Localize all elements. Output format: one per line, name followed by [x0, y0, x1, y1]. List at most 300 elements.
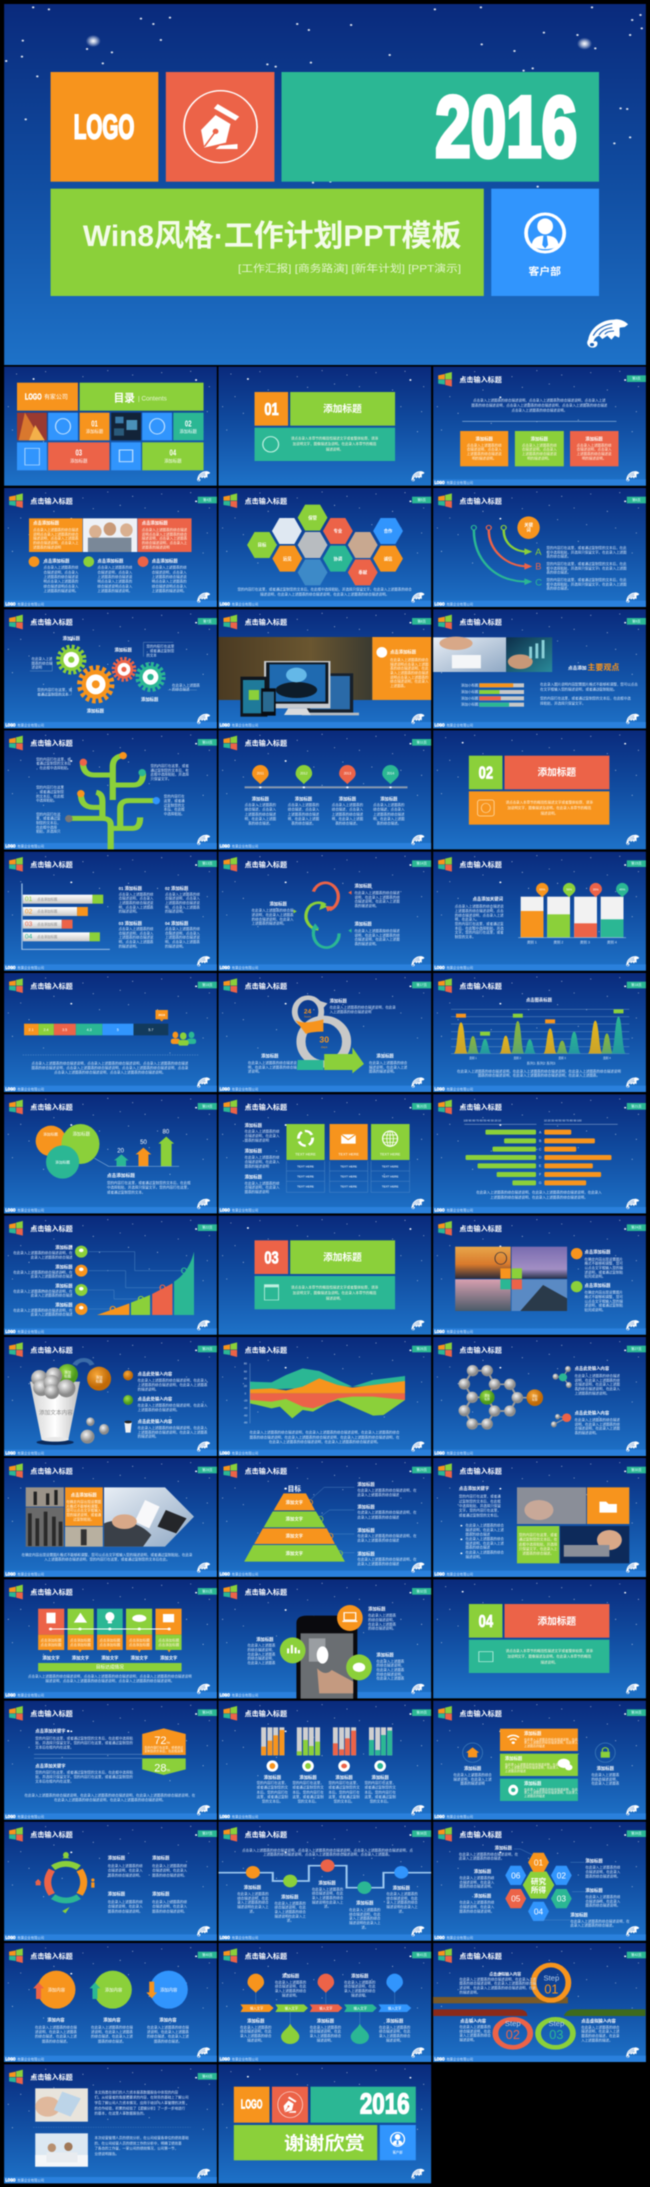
- slide: ring cycle: 添加标题: [108, 1891, 126, 1898]
- slide: key point bars: 在文字框输入您的描述说明，或者通过复制粘贴。: [540, 686, 617, 691]
- slide: phone with bubbles: 的综合描述说明，: [368, 1617, 396, 1622]
- slide: horizontal bars list: 合描述说明，点击录入: [119, 896, 154, 901]
- slide: three big circles: 添加内容: [48, 1986, 66, 1993]
- slide: three stacked bands: 添加标题: [505, 1755, 523, 1762]
- slide: intro three boxes: 合描述说明，点击录入: [467, 447, 502, 452]
- slide: hexagon research: 添加标题: [570, 1911, 588, 1918]
- slide: four city photos: 述说明，或者通过复制粘: [585, 1269, 623, 1274]
- slide: curved arrows: 词: [526, 527, 531, 533]
- slide: five columns: 描述说明，点击录入上述图表的综合描述说明，点击录入上述图表的综合描述说明。: [45, 1678, 174, 1683]
- slide: ring cycle: 图表的综合描述说明。: [152, 1872, 187, 1877]
- slide: photo grid with bullets: 此框中选择粘贴，并选择: [519, 1541, 558, 1546]
- slide: molecule: 标题: [532, 1397, 538, 1401]
- slide: photo grid with bullets: 您的内容打在这里，或者: [519, 1532, 558, 1537]
- slide: stacked bar chart: 有果企业有限公司: [446, 965, 473, 970]
- slide: circular arrows: 表的描述说明。: [354, 941, 379, 946]
- slide: photo collage arrow: 您可以点击文字框输入: [66, 1508, 102, 1513]
- slide: step rings: 点击输入内容: [460, 2017, 487, 2024]
- slide: stacked bar chart: 您的内容打在这里，或者通过复: [455, 921, 504, 926]
- slide: hexagon research: 05: [511, 1894, 521, 1904]
- slide: four city photos: 贴完成说明。: [585, 1307, 605, 1312]
- slide: hexagon research: 04: [534, 1906, 544, 1916]
- slide: hexagon research: 合描述说明，在此录入: [459, 1879, 495, 1884]
- slide: photo grid with bullets: 第30页: [631, 1467, 642, 1472]
- slide: three big circles: 述说明，在此录入上述图表: [35, 2029, 77, 2034]
- slide: cycle arrows 24/30: 有果企业有限公司: [232, 1086, 258, 1091]
- slide: timeline segmented bar: 3.5: [62, 1028, 67, 1032]
- slide: percent hexagons: 28%: [154, 1763, 170, 1775]
- slide: timeline pins: 上述图表的综合描述: [245, 811, 277, 816]
- slide: venn and arrows: [4, 1094, 217, 1213]
- slide: four bar groups: 您的文本后。: [262, 1799, 283, 1804]
- slide: section 02: 加说明文字，图像描述及说明。在此录入本章节的概括: [507, 805, 592, 810]
- slide: photo grid with bullets: 通过复制您的文本后，在: [519, 1537, 558, 1542]
- slide: step rings: 图表的综合描述说明，在此录入上述图表的综合描: [459, 1981, 537, 1986]
- slide: chevron process: 描述说明。: [247, 2037, 265, 2042]
- slide: three big circles: 述说明，在此录入上述图表: [91, 2029, 133, 2034]
- slide: chevron process: 第41页: [416, 1952, 427, 1957]
- slide: tree: 粘贴，并选择只: [36, 829, 61, 834]
- slide: team photo panels: 述图表的描述说明: [33, 544, 62, 549]
- slide: timeline segmented bar: 5.7: [148, 1028, 153, 1032]
- slide: key point bars: 添加小标题: [461, 695, 479, 700]
- slide: stepped line: 描述说明在此录入上: [349, 1920, 381, 1925]
- slide: circular arrows: 在此录入上述图表的综合描述: [354, 890, 400, 895]
- slide: stepped line: 描述说明在此录入上: [386, 1904, 418, 1909]
- slide: stacked area chart: -40: [243, 1406, 248, 1410]
- slide: ring cycle: 添加标题: [152, 1855, 170, 1862]
- slide: four city photos: 在确定内容出现设置图片: [585, 1290, 623, 1295]
- slide: cup and balls: 上述图表的综合描述说明，在此录入上述图表: [138, 1382, 208, 1387]
- slide: photo collage arrow: LOGO: [5, 1571, 16, 1576]
- slide: cup and balls: 标题: [64, 1373, 72, 1378]
- slide: cycle arrows 24/30: days: [321, 1045, 328, 1049]
- slide: timeline pins: 上述图表的综合描述: [288, 811, 320, 816]
- slide: four bar groups: 或者通过复制您的文: [257, 1785, 289, 1790]
- slide: section 04: 添加标题: [537, 1615, 576, 1627]
- slide: growth steps: 添加标题: [55, 1244, 73, 1251]
- slide: phone with bubbles: 在此录入上述图表: [247, 1643, 276, 1648]
- slide: step rings: 在此录入上述图表的综合: [581, 2024, 620, 2029]
- slide: horizontal bars list: 上述图表的综合描述说: [119, 900, 154, 905]
- slide: three stacked bands: 在此录入上述图表的综合描述说明，在此: [524, 1786, 578, 1791]
- slide: photo grid with bullets: 述图表的综合描述。: [522, 1551, 554, 1556]
- slide: phone with bubbles: 在此录入上述图表: [376, 1676, 405, 1681]
- slide: four bar groups: 您的内容打在这里，: [292, 1780, 324, 1785]
- slide: photo collage arrow: [4, 1458, 217, 1577]
- slide: horizontal bars list: 明，点击录入上述图表: [165, 904, 200, 909]
- slide: hexagon research: 在此录入上述图表的综: [585, 1865, 621, 1870]
- slide: timeline pins: 明，在此录入上述图: [288, 816, 320, 821]
- slide: percent hexagons: 复制您的文本后，在此框选择: [144, 1748, 183, 1753]
- slide: timeline pins: 2013: [344, 772, 351, 776]
- department tile: 客户部: [529, 265, 561, 278]
- slide: stacked bar chart: 第15页: [631, 861, 642, 866]
- slide: stepped line: 在此录入上述图表的: [237, 1891, 269, 1896]
- slide: table tiles: TEXT HERE: [382, 1185, 398, 1189]
- slide: stepped line: 第38页: [416, 1831, 427, 1836]
- slide: gears: LOGO: [5, 722, 16, 728]
- slide: cup and balls: 在此录入上述图表的综合描述说明，在此录入: [138, 1425, 208, 1430]
- slide: ring cycle: 点击输入标题: [30, 1830, 73, 1839]
- slide: hexagon research: 在此录入上述图表的综: [585, 1894, 621, 1899]
- slide: growth steps: 添加标题: [55, 1263, 73, 1270]
- slide: growth steps: 此录入上述图表的综合描述: [31, 1312, 73, 1317]
- slide: step rings: 02: [506, 2028, 520, 2042]
- slide: gears: 添加标题: [87, 707, 105, 714]
- slide: circular arrows: 述说明，在此录入上述图表: [252, 912, 294, 917]
- slide: ring cycle: 第37页: [202, 1831, 213, 1836]
- slide: chevron process: 综合描述说明，在此: [344, 1984, 376, 1989]
- slide: percent hexagons: 文本后在框内内在这里。: [35, 1745, 74, 1750]
- slide: timeline segmented bar: 有果企业有限公司: [17, 1086, 44, 1091]
- slide: hexagon research: 有果企业有限公司: [446, 1935, 473, 1940]
- slide: hexagon honeycomb: 您的内容打在这里，或者通过复制您的文本后，在此框中选择粘贴，并选择只保留文字。在此录入上述图表的综合: [237, 587, 412, 592]
- slide: hexagon research: LOGO: [434, 1934, 445, 1940]
- slide: phone with bubbles: 在此录入上述图表: [376, 1658, 405, 1663]
- slide: four bar groups: 您的内容打在这里，: [328, 1780, 360, 1785]
- slide: stacked area chart: 在此录入上述图表的综合描述说明，在此录入上述图表的综合描述说明。: [269, 1439, 380, 1444]
- slide: stacked bar chart: 上述图表的综合描述说明，点击: [455, 908, 504, 913]
- slide: butterfly chart: E: [539, 1164, 542, 1168]
- slide: intro three boxes: 点击录入上述图表的综: [577, 442, 612, 447]
- slide: timeline pins: 表的综合描述。: [291, 821, 316, 826]
- slide: stepped line: 描述说明在此录入上: [312, 1899, 344, 1904]
- slide: curved arrows: 有果企业有限公司: [446, 601, 473, 606]
- slide: team photo panels: 第4页: [203, 497, 212, 502]
- thumbnails rows 13 to 15: [4, 1822, 646, 2183]
- slide: two photos with text: 了各自的工作量，一家公司的绩效情况，公司第一节，: [95, 2146, 178, 2151]
- slide: four city photos: 格式不能够和调整，您可: [585, 1294, 623, 1299]
- slide: tree: 本后，在此框: [164, 807, 185, 812]
- slide: four bar groups: 本后。您的内容打在: [364, 1789, 396, 1794]
- slide: chevron process: 输入文字: [285, 2005, 299, 2010]
- slide: team photo panels: 点击录入上述图表的综: [97, 565, 133, 570]
- slide: gears: 您的内容打在这里: [146, 644, 175, 649]
- slide: tree: 此框中选择粘贴，并选择: [150, 772, 189, 777]
- slide: timeline pins: 添加标题: [380, 795, 398, 802]
- slide: three big circles: [4, 1943, 217, 2062]
- slide: cycle arrows 24/30: 点击输入标题: [245, 981, 287, 990]
- slide: molecule: 有果企业有限公司: [446, 1450, 473, 1455]
- slide: cup and balls: 添加: [64, 1369, 72, 1374]
- slide: horizontal bars list: 合描述说明，点击录入: [165, 896, 200, 901]
- slide: four bar groups: 或者通过复制您的文: [292, 1785, 324, 1790]
- slide: tree: 者通过复制您的文本后: [36, 761, 71, 766]
- slide: intro three boxes: 点击录入上述图表的综: [467, 442, 502, 447]
- slide: horizontal bars list: 明，点击录入上述图表: [165, 939, 200, 944]
- slide: horizontal bars list: 的描述说明。: [119, 909, 139, 914]
- slide: three big circles: 图表的综合描述。: [98, 2038, 126, 2043]
- slide: percent hexagons: 点击添加关键字 ■: [35, 1728, 70, 1735]
- slide: table tiles: 添加标题: [245, 1122, 263, 1129]
- slide: circular arrows: 点击输入标题: [245, 860, 287, 869]
- slide: pyramid: 在此录入上述图表的综合描述说明，在: [357, 1510, 417, 1515]
- slide: table tiles: 添加标题: [245, 1173, 263, 1180]
- slide: tree: 中选择粘贴。: [36, 798, 57, 803]
- slide: ring cycle: LOGO: [5, 1934, 16, 1940]
- slide: stepped line: LOGO: [220, 1934, 231, 1940]
- slide: butterfly chart: 上述图表的综合描述说明，在此录入上述图表的综合描述说明。: [490, 1194, 588, 1199]
- slide: venn and arrows: 50: [140, 1140, 147, 1146]
- slide: chevron process: 描述说明。: [386, 2037, 403, 2042]
- slide: four bar groups: 或者通过复制您的文: [364, 1785, 396, 1790]
- slide: horizontal bars list: 点击录入上述图表的综: [165, 926, 200, 931]
- slide: stepped line: 在此录入上述图表的: [386, 1891, 418, 1896]
- slide: four bar groups: 本后。您的内容打在: [257, 1789, 289, 1794]
- slide: photo collage arrow: 点击添加标题: [71, 1492, 97, 1499]
- slide: three big circles: 添加内容: [105, 1986, 123, 1993]
- slide: hexagon honeycomb: 远见: [283, 555, 292, 562]
- slide: curved arrows: 框中选择粘贴，并选择只保留文字。在此录入上述图: [546, 565, 627, 570]
- slide: horizontal bars list: 第13页: [202, 861, 213, 866]
- slide: phone with bubbles: 的综合描述说明，: [376, 1663, 404, 1668]
- slide: gears: 第7页: [203, 618, 212, 623]
- slide: ring cycle: 有果企业有限公司: [17, 1935, 44, 1940]
- slide: stacked area chart: -60: [243, 1413, 248, 1417]
- slide: peak chart: 第18页: [631, 982, 642, 987]
- slide: four bar groups: 添加标题: [371, 1774, 389, 1781]
- slide: four bar groups: [218, 1701, 431, 1820]
- slide: four city photos: 格式不能够和调整，您可: [585, 1261, 623, 1266]
- slide: contents: LOGO: [25, 393, 42, 402]
- slide: intro three boxes: 点击录入上述图表的综合描述说明。: [511, 407, 567, 412]
- slide: molecule: 添加: [484, 1394, 490, 1398]
- slide: step rings: 录入上述图表的综合: [459, 2033, 491, 2038]
- slide: step rings: 点击虚拟输入内容: [489, 1970, 521, 1976]
- slide: table tiles: 图表的描述说明: [245, 1189, 269, 1194]
- slide: hexagon honeycomb: 描述说明，在此录入上述图表的综合描述说明，在此录入上述图表的综合描述说明。: [260, 592, 389, 597]
- slide: devices: 有果企业有限公司: [232, 723, 258, 728]
- slide: three stacked bands: 图表的描述说明: [460, 1781, 485, 1786]
- slide: hexagon research: 点击输入标题: [459, 1830, 502, 1839]
- slide: team photo panels: 点击添加标题: [33, 520, 60, 527]
- slide: four bar groups: LOGO: [220, 1813, 231, 1819]
- slide: three stacked bands: 录入上述图表的综合描述说明，在此录入: [505, 1765, 559, 1770]
- slide: contents: 03: [75, 450, 82, 458]
- slide: percent hexagons: 点击输入标题: [30, 1709, 73, 1718]
- slide: pyramid: 在此录入上述图表的综合描述说明，在: [357, 1487, 417, 1492]
- slide: cycle arrows 24/30: hours: [304, 1014, 312, 1018]
- slide: tree: 只保留文字。: [150, 776, 171, 781]
- slide: step rings: 点击输入标题: [459, 1951, 502, 1960]
- slide: three big circles: 点击输入标题: [30, 1951, 73, 1960]
- slide: stepped line: 添加标题: [393, 1884, 411, 1891]
- slide: key point bars: 第9页: [632, 618, 641, 623]
- slide: five columns: [4, 1579, 217, 1698]
- slide: pyramid: 添加标题: [357, 1527, 375, 1534]
- slide: ring cycle: 在此录入上述图表的综: [152, 1899, 188, 1904]
- slide: tree: 制您的文本后，: [36, 820, 60, 825]
- slide: circular arrows: LOGO: [220, 964, 231, 970]
- slide: hexagon honeycomb: 点击输入标题: [245, 496, 287, 505]
- slide: tree: 点击输入标题: [30, 739, 73, 748]
- slide: chevron process: 添加标题: [282, 1972, 300, 1979]
- slide: timeline pins: 表的综合描述。: [335, 821, 360, 826]
- slide: contents: 01: [91, 421, 98, 429]
- slide: four bar groups: 本后。您的内容打在: [328, 1789, 360, 1794]
- slide: stepped line: 录入上述图表的综合: [386, 1900, 418, 1905]
- slide: growth steps: 此录入上述图表的综合描述: [31, 1254, 73, 1259]
- slide: growth steps: LOGO: [5, 1328, 16, 1334]
- slide: team photo panels: 的综合描述说明，点击录入上: [142, 540, 188, 545]
- slide: curved arrows: 框中选择粘贴，并选择只保留文字。在此录入上述图: [546, 581, 627, 586]
- slide: horizontal bars list: 上述图表的综合描述说: [165, 900, 200, 905]
- slide: phone with bubbles: 在此录入上述图表: [376, 1667, 405, 1672]
- slide: timeline pins: 表的综合描述。: [377, 821, 401, 826]
- slide: intro three boxes: 上述图表的综合描述说: [522, 451, 557, 456]
- slide: pyramid: 在此录入上述图表的综合描述说明，在: [357, 1533, 417, 1538]
- slide: horizontal bars list: 03: [25, 921, 33, 928]
- slide: devices: 表的综合描述说明，在此: [390, 666, 429, 671]
- slide: team photo panels: 合描述说明，点击录入: [152, 569, 187, 574]
- slide: growth steps: 点击输入标题: [30, 1224, 73, 1233]
- slide: thank you: [218, 2064, 431, 2183]
- slide: stacked bar chart: 35%: [593, 887, 599, 891]
- slide: three stacked bands: 有果企业有限公司: [446, 1814, 473, 1819]
- slide: hexagon research: 在此录入上述图表的综合描述说明，在: [459, 1851, 519, 1856]
- slide: gears: 您的内容打在这里，或: [37, 687, 73, 692]
- slide: percent hexagons: 第34页: [202, 1710, 213, 1715]
- slide: percent hexagons: 有果企业有限公司: [17, 1814, 44, 1819]
- slide: three big circles: 图表的综合描述。: [154, 2038, 182, 2043]
- slide: ring cycle: 在此录入上述图表的综: [108, 1863, 143, 1868]
- slide: devices: 上述图表。: [390, 683, 408, 688]
- slide: horizontal bars list: 01: [25, 896, 33, 903]
- slide: molecule: 在此录入上述图表的综合描述: [575, 1417, 620, 1422]
- slide: intro three boxes: 上述图表的综合描述说: [577, 451, 612, 456]
- slide: intro three boxes: 添加标题: [476, 435, 494, 442]
- slide: timeline segmented bar: 5: [117, 1028, 119, 1032]
- slide: cup and balls: 添加: [96, 1374, 103, 1379]
- slide: stepped line: 在此录入上述图表的: [312, 1886, 344, 1891]
- slide: horizontal bars list: 点击录入上述图表的综: [119, 891, 154, 896]
- slide: tree: 您的内容打在: [164, 794, 185, 799]
- slide: hexagon research: 06: [511, 1870, 521, 1880]
- slide: three big circles: 述说明，在此录入上述图表: [147, 2029, 189, 2034]
- slide: five columns: 点击添加标题: [129, 1637, 150, 1642]
- slide: three stacked bands: 添加标题: [464, 1765, 482, 1772]
- slide: table tiles: TEXT HERE: [382, 1175, 398, 1179]
- slide: hexagon research: 03: [557, 1894, 566, 1904]
- slide: five columns: 添加文字: [160, 1654, 178, 1661]
- slide: horizontal bars list: 点击添加标题: [37, 921, 58, 926]
- slide: tree: 通过复制您的文本后，在: [150, 767, 189, 772]
- slide: intro three boxes: LOGO: [434, 479, 445, 485]
- slide: team photo panels: 综合描述说明点击录入: [97, 583, 133, 588]
- slide: five columns: 点击录入上述图表的综合描述说明，点击录入上述图表的综合描述说明，点击录入上述图表的综合描述说明: [28, 1674, 192, 1679]
- slide: section 02: 请点击录入本章节的概括性描述文字或者整体轮廓，请添: [506, 799, 593, 804]
- slide: hexagon honeycomb: 目标: [258, 542, 267, 549]
- slide: butterfly chart: 10 20 30 40 50 60 70 80 90 100: [544, 1119, 582, 1123]
- slide: chevron process: 综合描述说明，在此: [275, 1984, 307, 1989]
- slide: photo grid with bullets: 过复制您的文本后，在此框: [459, 1498, 501, 1503]
- slide: curved arrows: A: [535, 547, 542, 557]
- slide: cycle arrows 24/30: 描述说明，在此录入上述: [369, 1064, 408, 1069]
- slide: photo grid with bullets: 点击添加关键字: [459, 1485, 490, 1492]
- slide: horizontal bars list: 有果企业有限公司: [17, 965, 44, 970]
- slide: step rings: 在此录入上述图表的综合描述说明，在此录入上述: [459, 1976, 537, 1981]
- slide: growth steps: 在此录入上述图表的综合描述说明，在: [13, 1288, 73, 1293]
- slide: stepped line: 添加标题: [356, 1900, 374, 1907]
- slide: step rings: 在此录入上述图表的: [459, 2024, 491, 2029]
- slide: butterfly chart: 在此录入上述图表的综合描述说明，在此录入上述图表的综合描述说明，在此录入: [476, 1190, 602, 1195]
- slide: devices: 点击添加标题: [390, 649, 417, 656]
- slide: cup and balls: LOGO: [5, 1450, 16, 1455]
- slide: step rings: 描述说明，在此录入上述: [581, 2029, 620, 2034]
- slide: photo grid with bullets: 或者通过复制您的文本后。: [459, 1512, 501, 1517]
- slide: five columns: 点击添加标题: [70, 1642, 91, 1647]
- slide: ring cycle: 添加标题: [152, 1891, 170, 1898]
- slide: curved arrows: B: [535, 562, 541, 572]
- slide: intro three boxes: 点击录入上述图表的综合描述说明，点击录入上述图表的综合描述说明，点击录入上述: [473, 397, 606, 402]
- slide: three stacked bands: 在此录入上述图表的综合: [453, 1772, 492, 1777]
- slide: stepped line: 添加标题: [244, 1884, 262, 1891]
- slide: hexagon research: 图表的综合描述说明。: [459, 1908, 494, 1913]
- slide: pyramid: 点击输入标题: [245, 1466, 287, 1475]
- slide: stepped line: 述。: [324, 1904, 331, 1909]
- slide: horizontal bars list: 点击添加标题: [37, 909, 58, 914]
- slide: horizontal bars list: 合描述说明，点击录入: [119, 930, 154, 935]
- slide: three stacked bands: 描述说明，在此录入上述: [453, 1776, 492, 1781]
- slide: stepped line: 在此录入上述图表的: [275, 1900, 306, 1905]
- slide: butterfly chart: F: [539, 1173, 541, 1177]
- slide: devices: 第8页: [417, 618, 427, 623]
- slide: key point bars: 您的内容打在这里，或者通过复制您的文本后，在此框中选: [540, 696, 631, 701]
- slide: five columns: 点击添加标题: [41, 1637, 62, 1642]
- slide: gears: ，或者通过复制您: [146, 648, 175, 653]
- slide: circular arrows: 在此录入上述图表的综合描述: [354, 928, 400, 933]
- slide: hexagon research: 图表的综合描述说明。: [585, 1873, 620, 1878]
- slide: stacked area chart: 在此录入上述图表的综合描述说明，在此录入上述图表的综合描述说明，在此录入上述图表的综合: [250, 1430, 400, 1435]
- slide: three big circles: 的综合描述，在此录入上述: [35, 2034, 77, 2039]
- slide: photo grid with bullets: 点击输入标题: [459, 1466, 502, 1475]
- slide: gears: 在此录入上述: [32, 656, 53, 661]
- slide: stepped line: 综合描述说明，在此: [237, 1895, 269, 1900]
- slide: team photo panels: 点击添加标题: [152, 557, 178, 564]
- slide: section 03: 加说明文字，图像描述及说明。在此录入本章节的概括: [293, 1290, 377, 1295]
- slide: horizontal bars list: 02: [25, 908, 33, 915]
- slide: five columns: 点击添加标题: [129, 1642, 150, 1647]
- slide: photo grid with bullets: 描述说明。: [466, 1554, 483, 1559]
- slide: tree: 您的内容打在这: [36, 811, 61, 816]
- slide: five columns: 添加文字: [42, 1654, 60, 1661]
- slide: photo collage arrow: 在确定内容出现设置图: [66, 1499, 102, 1504]
- slide: intro three boxes: 添加标题: [585, 435, 603, 442]
- slide: gears: 者通过复制您的文本: [37, 691, 69, 696]
- slide: butterfly chart: A: [539, 1130, 542, 1134]
- main title tile: [51, 189, 484, 296]
- slide: contents: 添加标题: [70, 458, 88, 465]
- slide: growth steps: 添加标题: [55, 1282, 73, 1289]
- slide: timeline pins: 点击录入上述图表的: [245, 802, 277, 807]
- slide: contents: 添加标题: [164, 458, 182, 465]
- slide: timeline segmented bar: [4, 973, 217, 1092]
- slide: phone with bubbles: 有果企业有限公司: [232, 1693, 258, 1698]
- slide: two photos with text: 业绩说明报告。: [95, 2151, 119, 2156]
- slide: stepped line: 在此录入上述图表的: [349, 1907, 381, 1912]
- slide: table tiles: TEXT HERE: [382, 1164, 398, 1168]
- slide: chevron process: [218, 1943, 431, 2062]
- slide: timeline segmented bar: LOGO: [5, 1086, 16, 1091]
- slide: stacked area chart: 40: [244, 1377, 247, 1381]
- slide: molecule: 点击输入标题: [459, 1345, 502, 1354]
- slide: horizontal bars list: 的描述说明。: [165, 909, 186, 914]
- slide: hexagon research: 第39页: [631, 1831, 642, 1836]
- slide: team photo panels: 上述图表的综合描述说: [97, 574, 133, 579]
- slide: circular arrows: 添加标题: [354, 882, 372, 889]
- slide: section 01: 加说明文字，图像描述及说明。在此录入本章节的概括: [293, 441, 377, 446]
